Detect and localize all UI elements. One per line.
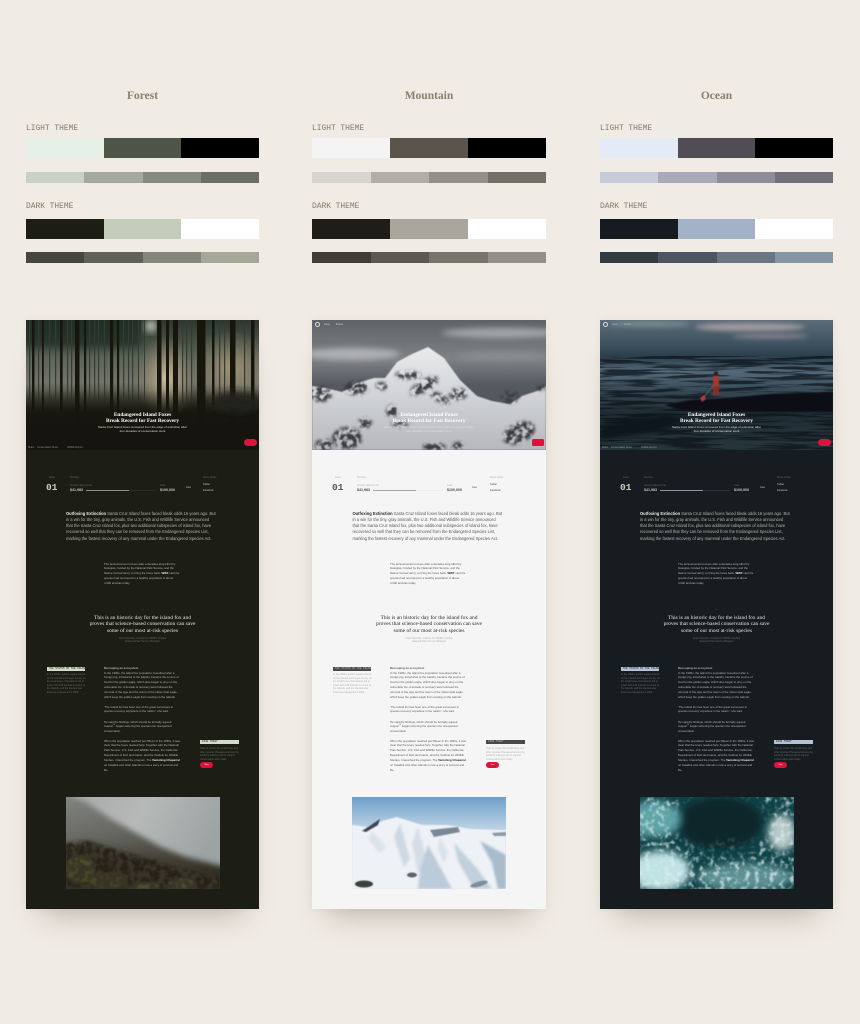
donate button: [532, 439, 544, 446]
progress track: [416, 490, 443, 491]
progress track: [703, 490, 730, 491]
secondary paragraph: biologists, funded by the National Park Service, and the: [104, 566, 174, 570]
quote attribution: Chief Scientist, Institute for Wildlife Studies: [119, 637, 166, 640]
sidebar button: Give: [778, 764, 783, 766]
article paragraph four: [104, 738, 180, 772]
primary dark swatches: [312, 219, 546, 239]
pull quote: proves that science-based conservation can save: [90, 621, 195, 627]
share link two: Facebook: [203, 489, 214, 492]
secondary paragraph: Nature Conservancy, to bring the foxes back. WWF said the: [104, 571, 179, 575]
secondary paragraph: Nature Conservancy, to bring the foxes back. WWF said the: [678, 571, 753, 575]
sidebar note two: world by making a gift to support: [486, 754, 521, 757]
article paragraph four: Studies, it launched the program. The Vanishing Chaparral: [678, 758, 754, 762]
secondary paragraph: biologists, funded by the National Park Service, and the: [390, 566, 460, 570]
intro paragraph: recovered so well that they can be removed from the Endangered Species List,: [640, 529, 783, 534]
raised caption: Amount raised so far: [357, 484, 379, 487]
article paragraph one: [390, 670, 465, 700]
intro paragraph: Outfoxing Extinction Santa Cruz Island foxes faced bleak odds 16 years ago. But: [352, 510, 502, 516]
sidebar note two: [774, 747, 813, 761]
sidebar note: the islands, and the species was: [47, 687, 82, 690]
hero title: Endangered Island Foxes: [400, 412, 458, 418]
article paragraph three: August10 began ushering the species into unexpected: [390, 724, 458, 728]
sidebar note two: other species threatened across the: [486, 751, 525, 754]
bottom photo: misty mountain forest: [66, 797, 220, 889]
article paragraph four: clear that the foxes needed help. Together with the National: [678, 743, 753, 747]
article paragraph four: Department of Fish and Game, and the Institute for Wildlife: [390, 753, 464, 757]
goal amount: $100,000: [160, 488, 175, 492]
hero footer text: Share Conservation News Wildlife Report: [28, 446, 83, 449]
sidebar label two: [200, 740, 239, 744]
hero nav: Issue Stories: [324, 323, 343, 326]
sidebar note: In the 1990s, golden eagles arrived: [47, 673, 85, 676]
secondary paragraph: biologists, funded by the National Park Service, and the: [678, 566, 748, 570]
article heading: Recouping an ecosystem: [390, 666, 424, 670]
label: light theme: LIGHT THEME: [312, 124, 364, 133]
progress fill: [373, 490, 416, 491]
secondary paragraph: [390, 562, 466, 585]
article paragraph four: [678, 738, 754, 772]
article paragraph four: Department of Fish and Game, and the Institute for Wildlife: [104, 753, 178, 757]
share link two: Facebook: [490, 489, 500, 492]
raised amount: $41,983: [357, 488, 370, 492]
intro paragraph: that the Santa Cruz Island fox, plus two additional subspecies of island fox, have: [640, 523, 785, 528]
article number: 01: [620, 482, 631, 493]
article paragraph two: [390, 704, 459, 714]
share label: Share article: [203, 476, 216, 479]
intro paragraph: that the Santa Cruz Island fox, plus two additional subspecies of island fox, have: [66, 523, 211, 528]
quote marker: “”: [428, 608, 430, 612]
article paragraph four: life.: [390, 768, 394, 772]
article paragraph one: vulnerable fox. A decade of recovery work followed the: [390, 685, 459, 689]
label: dark theme: DARK THEME: [26, 202, 73, 211]
progress fill: [86, 490, 129, 491]
hero nav: Issue Stories: [612, 323, 631, 326]
article paragraph four: Park Service, U.S. Fish and Wildlife Service, the California: [104, 748, 178, 752]
panel: Ocean page mockup: [600, 320, 833, 909]
pull quote: some of our most at-risk species: [681, 628, 752, 634]
sidebar note: fewer than 100 animals on some of: [333, 684, 371, 687]
hero title: Break Record for Fast Recovery: [392, 418, 466, 424]
sidebar note: on the islands and began to prey on: [333, 677, 372, 680]
pull quote: [376, 614, 482, 634]
article paragraph four: life.: [678, 768, 682, 772]
article paragraph four: When the population reached just fifteen in the 1990s, it was: [390, 738, 466, 742]
hero logo: [603, 322, 608, 327]
article paragraph three: August10 began ushering the species into unexpected: [678, 724, 746, 728]
intro paragraph: Outfoxing Extinction Santa Cruz Island foxes faced bleak odds 16 years ago. But: [66, 510, 216, 516]
intro paragraph: that the Santa Cruz Island fox, plus two additional subspecies of island fox, have: [352, 523, 498, 528]
pull quote: This is an historic day for the island fox and: [380, 614, 478, 620]
article number: 01: [332, 482, 343, 493]
article paragraph three: conservation.: [104, 729, 121, 733]
pull quote: some of our most at-risk species: [107, 628, 178, 634]
article paragraph one: removal of the pigs and the return of the native bald eagle,: [390, 690, 464, 694]
secondary paragraph: [678, 562, 753, 586]
bottom photo: turbulent sea from above: [640, 797, 794, 889]
sidebar label two: [774, 740, 813, 744]
secondary paragraph: species had recovered to a healthy population of about: [104, 576, 173, 580]
sidebar note two: [200, 747, 239, 761]
sidebar label two: GIVE TODAY: [488, 740, 504, 743]
sidebar note: fewer than 100 animals on some of: [621, 684, 659, 687]
hero title: Break Record for Fast Recovery: [106, 418, 179, 424]
hero logo: [315, 322, 320, 327]
article paragraph two: “The island fox has been one of the great successes in: [104, 704, 173, 708]
intro paragraph: in a win for the tiny, gray animals, the U.S. Fish and Wildlife Service announced: [640, 517, 783, 522]
article paragraph three: [390, 720, 458, 734]
hero subtitle: [98, 425, 187, 433]
hero title: [600, 412, 833, 424]
small label: issue: Issue: [335, 476, 341, 479]
article paragraph two: “The island fox has been one of the great successes in: [678, 704, 747, 708]
goal caption: Goal: [734, 484, 739, 487]
quote attribution: Chief Scientist, Institute for Wildlife Studies: [693, 637, 740, 640]
secondary paragraph: [104, 562, 180, 585]
share link one: Twitter: [490, 483, 497, 486]
palette column: Ocean: [600, 90, 833, 263]
primary light swatches: [312, 138, 546, 158]
secondary light swatches: [600, 172, 833, 183]
article heading: Recouping an ecosystem: [678, 666, 712, 670]
primary light swatches: [26, 138, 259, 158]
sidebar note two: conservation work today.: [774, 758, 801, 761]
intro paragraph: in a win for the tiny, gray animals, the U.S. Fish and Wildlife Service announced: [66, 517, 209, 522]
secondary dark swatches: [312, 252, 546, 263]
intro paragraph: in a win for the tiny, gray animals, the U.S. Fish and Wildlife Service announced: [352, 517, 496, 522]
progress fill: [660, 490, 703, 491]
quote marker: “”: [716, 608, 718, 612]
sidebar note: the small foxes. Populations fell to: [621, 680, 658, 683]
article paragraph four: on Catalina and other islands is now a story of survival and: [678, 763, 752, 767]
pull quote: proves that science-based conservation can save: [376, 621, 482, 627]
intro paragraph: recovered so well that they can be removed from the Endangered Species List,: [66, 529, 209, 534]
small link: Give: [186, 486, 191, 488]
sidebar button: Give: [204, 764, 209, 766]
secondary dark swatches: [26, 252, 259, 263]
article paragraph three: He said the findings, which should be formally agreed: [104, 720, 171, 724]
article paragraph four: Park Service, U.S. Fish and Wildlife Service, the California: [678, 748, 752, 752]
article heading: Recouping an ecosystem: [104, 666, 138, 670]
article paragraph one: food for the golden eagle, which also began to prey on the: [104, 680, 177, 684]
sidebar note: on the islands and began to prey on: [47, 677, 86, 680]
bottom photo: snowy ridges: [352, 796, 506, 888]
hero subtitle: four decades of conservation work: [406, 429, 452, 433]
heading: Mountain: Mountain: [405, 90, 453, 102]
article paragraph one: removal of the pigs and the return of the native bald eagle,: [678, 690, 752, 694]
sidebar button: [486, 762, 499, 768]
secondary light swatches: [312, 172, 546, 183]
article paragraph one: foreign pig, introduced to the islands, became the source of: [390, 675, 465, 679]
article paragraph four: Studies, it launched the program. The Vanishing Chaparral: [104, 758, 180, 762]
intro paragraph: recovered so well that they can be removed from the Endangered Species List,: [352, 529, 495, 534]
hero subtitle: four decades of conservation work: [694, 429, 739, 433]
goal caption: Goal: [447, 484, 452, 487]
hero: forest: [26, 320, 259, 450]
secondary dark swatches: [600, 252, 833, 263]
hero subtitle: [600, 425, 833, 433]
sidebar note two: Help us protect the small foxes and: [774, 747, 812, 750]
sidebar note two: [486, 747, 525, 761]
hero: ocean: [600, 320, 833, 450]
small link: Give: [760, 486, 765, 488]
secondary paragraph: The announcement comes after a decades-long effort by: [390, 562, 461, 566]
article paragraph two: species recovery anywhere in the nation,” she said.: [390, 709, 455, 713]
small link: Give: [472, 486, 477, 488]
article paragraph one: In the 1990s, the island fox population nosedived after a: [678, 670, 749, 674]
article paragraph four: [390, 738, 466, 772]
hero subtitle: Santa Cruz Island foxes recovered from the edge of extinction after: [672, 425, 761, 429]
heading: Ocean: Ocean: [701, 90, 732, 102]
article paragraph one: removal of the pigs and the return of the native bald eagle,: [104, 690, 178, 694]
secondary paragraph: 4,000 animals today.: [104, 581, 130, 585]
article paragraph four: When the population reached just fifteen in the 1990s, it was: [104, 738, 180, 742]
sidebar note: [47, 673, 86, 694]
primary dark swatches: [26, 219, 259, 239]
sidebar label two: GIVE TODAY: [202, 740, 218, 743]
panel: Forest page mockup: [26, 320, 259, 909]
small label: issue: Issue: [623, 476, 629, 479]
label: dark theme: DARK THEME: [312, 202, 359, 211]
sidebar note two: world by making a gift to support: [774, 754, 809, 757]
sidebar note two: Help us protect the small foxes and: [486, 747, 524, 750]
article paragraph two: species recovery anywhere in the nation,” she said.: [104, 709, 169, 713]
article paragraph four: on Catalina and other islands is now a story of survival and: [390, 763, 464, 767]
intro paragraph: [640, 510, 790, 542]
sidebar note two: other species threatened across the: [774, 751, 813, 754]
article paragraph one: vulnerable fox. A decade of recovery work followed the: [104, 685, 173, 689]
small label: funding: Funding: [644, 476, 653, 479]
raised amount: $41,983: [644, 488, 657, 492]
pull quote: This is an historic day for the island fox and: [94, 614, 191, 620]
progress track: [129, 490, 156, 491]
sidebar note: listed as endangered in 2004.: [621, 691, 653, 694]
article paragraph three: [104, 720, 172, 733]
sidebar note: on the islands and began to prey on: [621, 677, 660, 680]
small label: funding: Funding: [70, 476, 79, 479]
article paragraph one: which keep the golden eagle from nesting on the islands.: [390, 695, 462, 699]
quote attribution: [600, 637, 833, 643]
quote attribution: National Park Service Biologist: [125, 640, 160, 643]
article paragraph three: conservation.: [678, 729, 695, 733]
article paragraph one: foreign pig, introduced to the islands, became the source of: [104, 675, 179, 679]
intro paragraph: [66, 510, 216, 541]
photo: misty forest: [26, 320, 259, 450]
sidebar note: the islands, and the species was: [333, 687, 368, 690]
hero subtitle: Santa Cruz Island foxes recovered from the edge of extinction after: [98, 425, 187, 429]
article paragraph one: which keep the golden eagle from nesting on the islands.: [678, 695, 750, 699]
article paragraph one: In the 1990s, the island fox population nosedived after a: [390, 670, 461, 674]
hero subtitle: [384, 425, 474, 433]
pull quote: This is an historic day for the island fox and: [668, 614, 765, 620]
goal caption: Goal: [160, 484, 165, 487]
pull quote: [600, 614, 833, 634]
share link two: Facebook: [777, 489, 788, 492]
article paragraph two: [678, 704, 747, 714]
article paragraph one: food for the golden eagle, which also began to prey on the: [678, 680, 751, 684]
article paragraph four: clear that the foxes needed help. Together with the National: [390, 743, 465, 747]
palette column: Forest: [26, 90, 259, 263]
sidebar note: the islands, and the species was: [621, 687, 656, 690]
sidebar note: fewer than 100 animals on some of: [47, 684, 85, 687]
hero title: Endangered Island Foxes: [114, 412, 171, 418]
hero subtitle: Santa Cruz Island foxes recovered from the edge of extinction after: [384, 425, 474, 429]
quote attribution: National Park Service Biologist: [699, 640, 734, 643]
label: light theme: LIGHT THEME: [26, 124, 78, 133]
share label: Share article: [777, 476, 790, 479]
quote attribution: National Park Service Biologist: [412, 640, 446, 643]
sidebar button: [774, 762, 787, 768]
palette column: Mountain: [312, 90, 546, 263]
quote attribution: [405, 637, 453, 643]
secondary paragraph: The announcement comes after a decades-long effort by: [678, 562, 749, 566]
panel: Mountain page mockup: [312, 320, 546, 909]
sidebar note: listed as endangered in 2004.: [47, 691, 79, 694]
pull quote: [90, 614, 196, 634]
quote marker: “”: [142, 608, 144, 612]
article paragraph three: [678, 720, 746, 734]
sidebar note: [621, 673, 660, 695]
raised caption: Amount raised so far: [644, 484, 666, 487]
secondary light swatches: [26, 172, 259, 183]
sidebar note: the small foxes. Populations fell to: [47, 680, 84, 683]
article paragraph two: [104, 704, 173, 713]
donate button: [244, 439, 257, 446]
article paragraph four: When the population reached just fifteen in the 1990s, it was: [678, 738, 754, 742]
article paragraph three: He said the findings, which should be formally agreed: [390, 720, 457, 724]
hero footer text: Share Conservation News Wildlife Report: [602, 446, 657, 449]
secondary paragraph: The announcement comes after a decades-long effort by: [104, 562, 175, 566]
hero title: Endangered Island Foxes: [688, 412, 745, 418]
raised amount: $41,983: [70, 488, 83, 492]
share link one: Twitter: [777, 483, 784, 486]
goal amount: $100,000: [447, 488, 462, 492]
hero: mountain: [312, 320, 546, 450]
secondary paragraph: species had recovered to a healthy population of about: [678, 576, 747, 580]
sidebar label two: GIVE TODAY: [776, 740, 792, 743]
intro paragraph: Outfoxing Extinction Santa Cruz Island foxes faced bleak odds 16 years ago. But: [640, 510, 790, 516]
article paragraph four: Park Service, U.S. Fish and Wildlife Service, the California: [390, 748, 464, 752]
article paragraph one: food for the golden eagle, which also began to prey on the: [390, 680, 463, 684]
article paragraph two: species recovery anywhere in the nation,” she said.: [678, 709, 743, 713]
quote attribution: [118, 637, 166, 643]
sidebar note two: Help us protect the small foxes and: [200, 747, 238, 750]
sidebar note two: conservation work today.: [486, 758, 513, 761]
article paragraph one: In the 1990s, the island fox population nosedived after a: [104, 670, 175, 674]
sidebar note two: conservation work today.: [200, 758, 227, 761]
photo: snowy peak: [312, 320, 546, 450]
sidebar note: [333, 673, 372, 694]
article paragraph four: on Catalina and other islands is now a story of survival and: [104, 763, 178, 767]
person: [700, 371, 719, 402]
article paragraph three: conservation.: [390, 729, 407, 733]
hero subtitle: four decades of conservation work: [120, 429, 165, 433]
article paragraph one: vulnerable fox. A decade of recovery work followed the: [678, 685, 747, 689]
sidebar note two: world by making a gift to support: [200, 754, 235, 757]
sidebar button: [200, 762, 213, 768]
intro paragraph: marking the fastest recovery of any mammal under the Endangered Species Act.: [640, 536, 786, 540]
small label: issue: Issue: [49, 476, 55, 479]
label: light theme: LIGHT THEME: [600, 124, 652, 133]
sidebar note: listed as endangered in 2004.: [333, 691, 365, 694]
article paragraph one: [678, 670, 753, 700]
share label: Share article: [490, 476, 503, 479]
pull quote: some of our most at-risk species: [393, 628, 465, 634]
sidebar label two: [486, 740, 525, 744]
sidebar note: the small foxes. Populations fell to: [333, 680, 370, 683]
pull quote: proves that science-based conservation can save: [664, 621, 769, 627]
article number: 01: [46, 482, 57, 493]
article paragraph three: August10 began ushering the species into unexpected: [104, 724, 172, 728]
label: dark theme: DARK THEME: [600, 202, 647, 211]
secondary paragraph: species had recovered to a healthy population of about: [390, 576, 459, 580]
article paragraph four: life.: [104, 768, 108, 772]
sidebar note two: other species threatened across the: [200, 751, 239, 754]
goal amount: $100,000: [734, 488, 749, 492]
article paragraph four: Studies, it launched the program. The Vanishing Chaparral: [390, 758, 466, 762]
secondary paragraph: Nature Conservancy, to bring the foxes back. WWF said the: [390, 571, 465, 575]
secondary paragraph: 4,000 animals today.: [390, 581, 416, 585]
sidebar note: In the 1990s, golden eagles arrived: [333, 673, 371, 676]
hero title: [392, 412, 466, 424]
article paragraph two: “The island fox has been one of the great successes in: [390, 704, 459, 708]
donate button: [818, 439, 831, 446]
article paragraph one: which keep the golden eagle from nesting on the islands.: [104, 695, 176, 699]
intro paragraph: marking the fastest recovery of any mammal under the Endangered Species Act.: [352, 536, 498, 540]
small label: funding: Funding: [357, 476, 366, 479]
sidebar button: Give: [490, 764, 495, 766]
article paragraph three: He said the findings, which should be formally agreed: [678, 720, 745, 724]
share link one: Twitter: [203, 483, 210, 486]
secondary paragraph: 4,000 animals today.: [678, 581, 704, 585]
quote attribution: Chief Scientist, Institute for Wildlife Studies: [405, 637, 453, 640]
article paragraph four: clear that the foxes needed help. Together with the National: [104, 743, 179, 747]
article paragraph one: foreign pig, introduced to the islands, became the source of: [678, 675, 753, 679]
primary dark swatches: [600, 219, 833, 239]
intro paragraph: marking the fastest recovery of any mammal under the Endangered Species Act.: [66, 536, 212, 540]
photo: paddleboarder at dusk: [600, 320, 833, 450]
article paragraph one: [104, 670, 179, 699]
article paragraph four: Department of Fish and Game, and the Institute for Wildlife: [678, 753, 752, 757]
raised caption: Amount raised so far: [70, 484, 92, 487]
heading: Forest: Forest: [127, 90, 158, 102]
primary light swatches: [600, 138, 833, 158]
hero title: [106, 412, 179, 424]
intro paragraph: [352, 510, 502, 541]
sidebar note: In the 1990s, golden eagles arrived: [621, 673, 659, 676]
hero title: Break Record for Fast Recovery: [680, 418, 753, 424]
